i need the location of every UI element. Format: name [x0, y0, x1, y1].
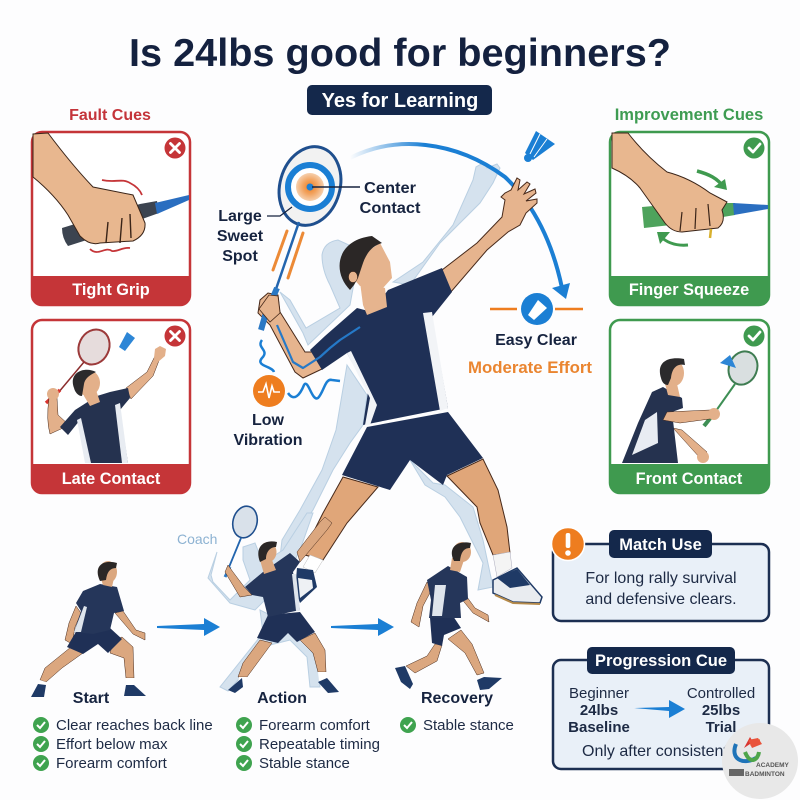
checklist: Forearm comfort — [259, 717, 371, 734]
forearm vibration line — [277, 325, 360, 368]
player: start stance — [31, 561, 146, 697]
baseline: 24lbs — [580, 702, 618, 719]
checklist: Clear reaches back line — [56, 717, 213, 734]
main player — [258, 178, 542, 604]
footnote: Only after consistent — [582, 743, 728, 760]
checklist — [236, 717, 380, 772]
checklist: Repeatable timing — [259, 736, 380, 753]
trial: Trial — [706, 719, 736, 736]
callout: easy clear: Easy Clear — [495, 332, 577, 349]
logo badge — [722, 723, 798, 799]
label band — [32, 464, 190, 493]
callout: center contact: Center — [364, 180, 416, 197]
left leg — [305, 477, 378, 560]
socks — [303, 555, 323, 573]
icon: warning — [552, 528, 584, 560]
stage: Recovery — [395, 542, 514, 734]
trial: 25lbs — [702, 702, 740, 719]
callout: large sweet spot — [217, 207, 292, 265]
heading: Fault Cues: Fault Cues — [69, 107, 151, 124]
panel: Late Contact — [32, 320, 190, 493]
callout: easy clear: Moderate Effort — [468, 359, 593, 377]
verdict pill: Yes for Learning: Yes for Learning — [322, 90, 478, 112]
baseline: Baseline — [568, 719, 630, 736]
icon: check — [744, 138, 764, 158]
checklist — [33, 717, 213, 772]
label: Recovery — [421, 690, 493, 707]
icon: cross — [164, 326, 186, 346]
checklist: Stable stance — [423, 717, 514, 734]
callout: low vibration: Low — [252, 412, 285, 429]
heading: Improvement Cues: Improvement Cues — [615, 106, 763, 124]
trial — [687, 685, 755, 736]
shorts — [342, 412, 483, 490]
heading pill: Match Use — [619, 536, 702, 554]
body text: and defensive clears. — [585, 591, 737, 608]
illustration: relaxed finger grip — [612, 133, 768, 245]
panel: Progression Cue — [553, 647, 769, 769]
stage: Action — [208, 504, 380, 772]
arrow: start to action — [157, 618, 220, 636]
neck — [360, 282, 387, 315]
illustration: tense hand on grip — [33, 133, 189, 252]
shirt — [310, 268, 452, 425]
baseline: Beginner — [569, 685, 629, 702]
shoes — [295, 568, 317, 603]
arrow: action to recovery — [331, 618, 394, 636]
heading pill — [587, 647, 735, 674]
heading pill: Progression Cue — [595, 652, 727, 670]
callout: large sweet spot: Spot — [222, 248, 258, 265]
panel: Finger Squeeze — [610, 132, 769, 305]
arrow — [634, 700, 685, 718]
callout: low vibration: Vibration — [233, 432, 303, 449]
illustration: front contact player — [622, 347, 762, 463]
label band — [32, 276, 190, 305]
icon: cross — [164, 138, 186, 158]
checklist: Forearm comfort — [56, 755, 168, 772]
label band: Finger Squeeze — [629, 281, 749, 299]
callout: large sweet spot: Sweet — [217, 228, 264, 245]
label band — [610, 276, 769, 305]
label: Action — [257, 690, 307, 707]
heading pill — [609, 530, 712, 558]
racket arm — [258, 293, 322, 378]
label: Start — [73, 690, 110, 707]
logo badge: ACADEMY — [756, 762, 790, 769]
body text — [585, 570, 737, 608]
label band: Late Contact — [62, 470, 161, 488]
verdict pill: Yes for Learning — [307, 85, 492, 115]
body text: For long rally survival — [585, 570, 737, 587]
baseline — [568, 685, 630, 736]
label band: Front Contact — [636, 470, 743, 488]
panel: Tight Grip — [32, 132, 190, 305]
icon: check — [744, 326, 764, 346]
player: action stance — [225, 504, 339, 693]
player: recovery stride — [395, 542, 502, 690]
racket with sweet spot — [259, 139, 350, 330]
label band — [610, 464, 769, 493]
logo badge: BADMINTON — [745, 771, 785, 778]
right leg — [447, 459, 510, 555]
label: coach: Coach — [177, 531, 217, 547]
panel: Front Contact — [610, 320, 769, 493]
stage: Start — [31, 561, 213, 772]
checklist: Stable stance — [259, 755, 350, 772]
ghost coach silhouette of main player — [280, 163, 500, 590]
trial: Controlled — [687, 685, 755, 702]
ghost behind action player — [208, 513, 320, 691]
title: Is 24lbs good for beginners? — [129, 32, 671, 75]
face and hair — [352, 243, 392, 288]
icon: shuttlecock — [524, 131, 555, 162]
panel: Match Use — [552, 528, 769, 621]
raised arm — [442, 178, 537, 293]
callout: low vibration — [233, 340, 340, 449]
label band: Tight Grip — [72, 281, 150, 299]
illustration: late contact player — [46, 324, 166, 463]
callout: center contact: Contact — [360, 200, 421, 217]
trajectory arc — [350, 144, 570, 299]
checklist: Effort below max — [56, 736, 168, 753]
callout: easy clear — [468, 293, 593, 377]
callout: large sweet spot: Large — [218, 208, 262, 225]
callout: center contact — [312, 180, 421, 217]
